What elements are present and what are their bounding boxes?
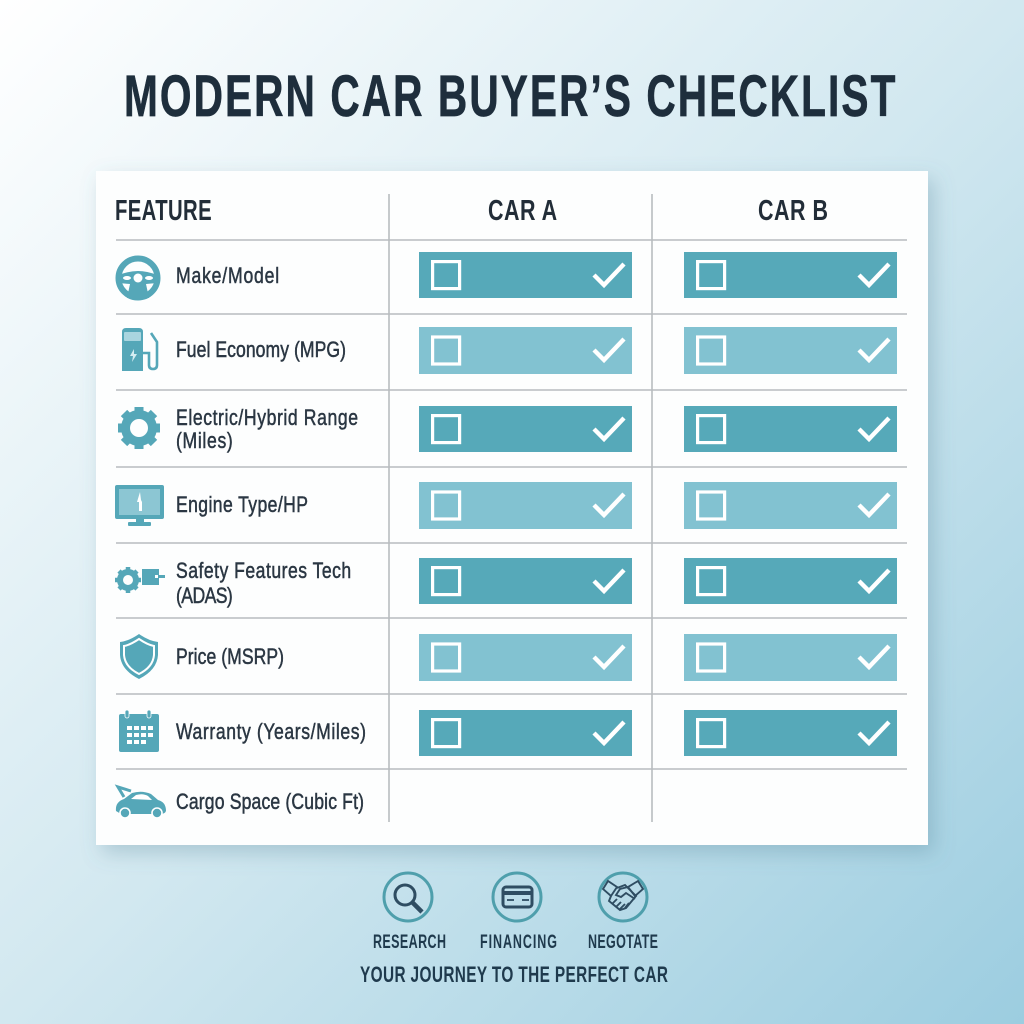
icon: shield — [120, 634, 158, 679]
label: electric/hybrid range: Electric/Hybrid Range — [176, 406, 358, 431]
title: MODERN CAR BUYER’S CHECKLIST — [124, 64, 896, 129]
icon: fuel pump — [122, 328, 157, 371]
label: safety features: (ADAS) — [176, 584, 233, 609]
icon: steering wheel — [118, 258, 158, 298]
heading: car B column: CAR B — [758, 195, 828, 227]
label: safety features: Safety Features Tech — [176, 559, 351, 584]
checkbox bars: row 7 — [419, 710, 897, 756]
heading: feature column: FEATURE — [115, 195, 212, 227]
heading: car A column: CAR A — [488, 195, 557, 227]
label: financing: FINANCING — [480, 931, 557, 953]
label: safety features — [176, 559, 351, 609]
label: research: RESEARCH — [373, 931, 446, 953]
label: make/model: Make/Model — [176, 264, 279, 289]
icon: car with open trunk — [116, 787, 166, 818]
icon: financing credit card — [493, 873, 541, 921]
checkbox bars: row 6 — [419, 634, 897, 681]
tagline: YOUR JOURNEY TO THE PERFECT CAR — [360, 963, 668, 988]
checkbox bars: row 2 — [419, 327, 897, 374]
icon: research magnifier — [384, 873, 432, 921]
label: electric/hybrid range — [176, 406, 358, 454]
icon: monitor — [115, 485, 164, 526]
icon: calendar — [119, 710, 159, 752]
label: warranty: Warranty (Years/Miles) — [176, 720, 366, 745]
label: fuel economy: Fuel Economy (MPG) — [176, 338, 346, 363]
icon: gear — [118, 407, 160, 449]
icon: negotiate handshake — [599, 873, 647, 921]
checkbox bars: row 5 — [419, 558, 897, 604]
label: cargo space: Cargo Space (Cubic Ft) — [176, 790, 364, 815]
icon: engine gear and battery — [115, 567, 165, 593]
label: price: Price (MSRP) — [176, 645, 284, 670]
label: engine type: Engine Type/HP — [176, 493, 308, 518]
label: negotate: NEGOTATE — [588, 931, 658, 953]
checkbox bars: row 1 — [419, 252, 897, 298]
checkbox bars: row 4 — [419, 482, 897, 529]
checkbox bars: row 3 — [419, 406, 897, 452]
panel: checklist table — [96, 171, 928, 845]
label: electric/hybrid range: (Miles) — [176, 429, 233, 454]
